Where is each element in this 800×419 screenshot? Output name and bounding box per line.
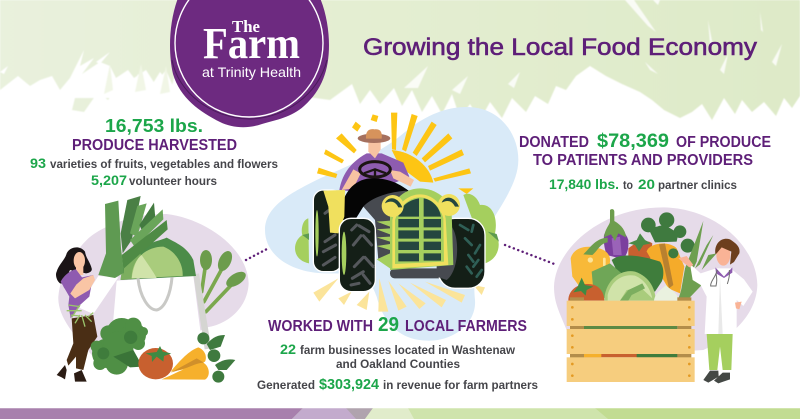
text block: donated produce: OF PRODUCE [676,134,771,151]
bag [110,276,205,367]
text block: produce harvested: varieties of fruits, vegetables and flowers [50,159,278,171]
crate [567,297,695,382]
asparagus [200,249,248,312]
lilac blob [554,207,757,357]
lamps [382,194,460,217]
bottom colour strip [0,408,800,419]
rear wheel [313,190,342,272]
illustration: sun and backdrop behind tractor [265,107,518,341]
text block: donated produce: partner clinics [658,180,737,192]
broccoli [91,318,148,375]
leek [78,196,168,314]
illustration: tractor [295,178,499,292]
logo ring [175,0,323,117]
cabbage [121,238,196,280]
carrot tops [197,332,235,383]
hood [342,178,410,220]
text block: local farmers: and Oakland Counties [336,359,460,371]
tomato [138,348,173,379]
title: Growing the Local Food Economy [363,34,757,61]
doctor [678,239,753,383]
text block: produce harvested: 93 [30,155,46,171]
bushes [295,188,499,263]
text block: donated produce: DONATED [519,134,589,151]
dotted connector left [246,249,267,260]
text block: local farmers: LOCAL FARMERS [405,318,527,335]
text block: local farmers: 22 [280,341,296,357]
text block: donated produce: 20 [638,176,655,192]
text block: local farmers: WORKED WITH [268,318,373,335]
logo wordmark: Farm [203,19,300,68]
logo badge [170,0,329,127]
text block: local farmers [257,314,538,393]
text block: donated produce: 17,840 lbs. [549,176,619,192]
blue blob [265,107,518,341]
text block: donated produce: TO PATIENTS AND PROVIDERS [533,152,753,169]
grille [390,188,453,270]
right wheel [437,218,485,288]
text block: donated produce [519,131,771,192]
lower rays [313,278,485,312]
lilac blob [58,214,249,357]
illustration: crate of produce and doctor [554,207,757,383]
text block: donated produce: to [623,180,633,192]
background: green watercolour wash [0,0,800,120]
text block: produce harvested: 5,207 [91,172,127,188]
text block: local farmers: Generated [257,380,315,392]
text block: donated produce: $78,369 [597,131,669,152]
text block: produce harvested: volunteer hours [129,176,217,188]
front left wheel [339,218,375,292]
logo wordmark: at Trinity Health [202,64,301,80]
text block: local farmers: 29 [378,314,399,336]
dotted connector right [505,245,557,265]
text block: produce harvested [30,115,278,188]
farmer [339,129,414,193]
carrots [171,347,206,372]
fender [323,190,345,233]
text block: local farmers: in revenue for farm partners [383,380,538,392]
engine [363,191,407,268]
text block: produce harvested: PRODUCE HARVESTED [72,137,237,154]
text block: produce harvested: 16,753 lbs. [105,115,203,136]
bag handle [138,277,172,310]
text block: local farmers: $303,924 [319,376,380,393]
text block: local farmers: farm businesses located in Washtenaw [300,345,515,357]
vegetables [568,209,717,301]
bottom bar [390,268,457,278]
sun rays [317,113,471,183]
illustration: woman with grocery bag [56,196,249,383]
logo wordmark: The [232,17,260,36]
woman [56,247,97,382]
